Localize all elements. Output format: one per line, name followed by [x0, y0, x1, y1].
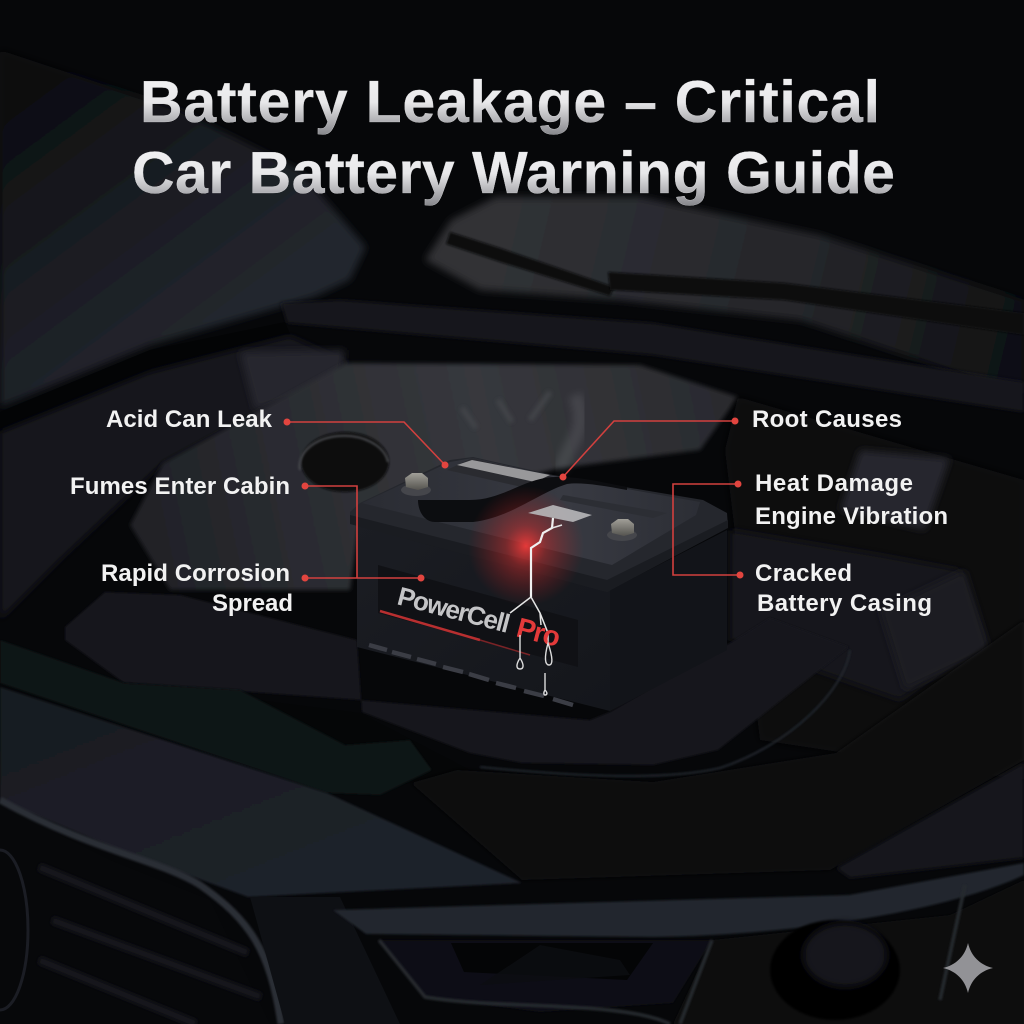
title: Battery Leakage – Critical: [140, 69, 880, 135]
lower left body panel: [0, 687, 522, 897]
label: fumes enter cabin: Fumes Enter Cabin: [70, 473, 290, 500]
callout dots: [284, 418, 744, 582]
label: rapid corrosion spread: Rapid Corrosion: [101, 560, 290, 587]
terminal right: [607, 519, 637, 541]
battery illustration: Pro: [513, 612, 564, 653]
centre body panel: [411, 620, 1024, 880]
grille: [0, 805, 270, 1024]
bracket strip: [0, 640, 432, 795]
leader: Root Causes: [563, 421, 735, 477]
label: acid can leak: Acid Can Leak: [106, 406, 273, 433]
label: rapid corrosion spread: [101, 560, 293, 617]
callout leader lines: [287, 421, 738, 578]
engine bay left: [0, 336, 350, 620]
label: heat damage engine vibration: [755, 470, 948, 530]
leader: Acid Can Leak: [287, 422, 445, 465]
label: cracked battery casing: [755, 560, 932, 617]
title: [132, 69, 895, 206]
leader: Fumes and Corrosion: [305, 486, 420, 578]
engine bay right: [725, 397, 1024, 780]
right body panel: [836, 763, 1024, 878]
open hood left panel: [0, 50, 366, 407]
top vent panel left: [447, 458, 553, 490]
label: heat damage engine vibration: Heat Damage: [755, 470, 913, 497]
label: rapid corrosion spread: Spread: [212, 590, 293, 617]
crack: [531, 518, 553, 597]
terminal left: [401, 473, 431, 496]
title: Car Battery Warning Guide: [132, 140, 895, 206]
black gap behind tray: [0, 683, 470, 793]
battery illustration: [350, 395, 728, 711]
battery lid: [350, 457, 728, 592]
label: root causes: Root Causes: [752, 406, 902, 433]
label: cracked battery casing: Cracked: [755, 560, 852, 587]
battery tray: [65, 592, 849, 765]
label plate: [378, 565, 578, 667]
cowl strut: [281, 300, 1024, 412]
icon: sparkle watermark: [943, 943, 993, 993]
callout labels: [70, 406, 948, 617]
acid drips: [517, 635, 552, 695]
red underline: [380, 611, 480, 640]
ventilation dashes: [369, 645, 573, 705]
bumper centre: [250, 897, 400, 1024]
battery front face: [357, 520, 610, 711]
brand text: PowerCell: [394, 581, 513, 639]
top vent panel right: [560, 495, 667, 518]
label: heat damage engine vibration: Engine Vibration: [755, 503, 948, 530]
engine cover: [130, 363, 738, 590]
wipers: [446, 232, 614, 296]
battery side face: [610, 530, 727, 711]
smoke: [560, 395, 580, 470]
white label on lid: [528, 505, 592, 522]
open hood right panel: [425, 197, 1024, 395]
handle and cable: [418, 477, 627, 522]
leader: Heat and Cracked: [673, 484, 738, 575]
headlight: [333, 863, 1024, 937]
label: cracked battery casing: Battery Casing: [757, 590, 932, 617]
red glow: [468, 486, 584, 606]
